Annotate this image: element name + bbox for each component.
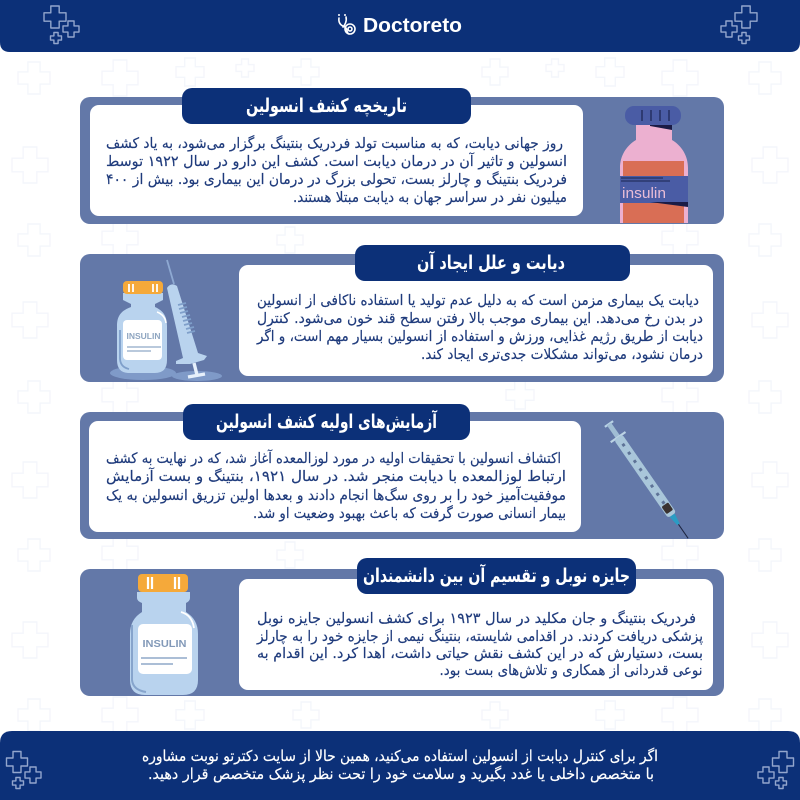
text card: روز جهانی دیابت، که به مناسبت تولد فردریک بنتینگ برگزار می‌شود، به یاد کشف xyxy=(106,134,563,152)
footer text: با متخصص داخلی یا غدد بگیرید و سلامت خود را تحت نظر پزشک متخصص قرار دهید. xyxy=(148,765,654,784)
text card: بست، دستیارش که در این کشف نقش حیاتی داشت، اهدا کرد. این اقدام به xyxy=(257,646,703,662)
text card xyxy=(89,421,581,532)
heading xyxy=(357,558,636,594)
logo: Doctoreto: Doctoreto xyxy=(363,15,462,37)
icon: vial and syringe xyxy=(110,260,222,381)
heading xyxy=(355,245,630,281)
icon: crosses right xyxy=(721,6,757,44)
icon: large insulin vial xyxy=(130,574,198,695)
text card: انسولین و تاثیر آن در درمان دیابت است. کشف این دارو در سال ۱۹۲۲ توسط xyxy=(106,152,567,170)
icon: large insulin vial: INSULIN xyxy=(142,639,186,650)
heading: جایزه نوبل و تقسیم آن بین دانشمندان xyxy=(363,563,630,587)
text card: نوعی قدردانی از همکاری و تلاش‌های بست بود. xyxy=(440,663,702,679)
panel: early insulin experiments xyxy=(80,404,724,543)
footer text xyxy=(142,747,658,784)
panel: diabetes and its causes xyxy=(80,245,724,382)
text card xyxy=(239,265,713,376)
text card: پزشکی دریافت کردند. در اقدامی شایسته، بنتینگ نیمی از جایزه خود را به چارلز xyxy=(256,627,703,645)
icon: crosses left xyxy=(6,752,41,788)
text card: فردریک بنتینگ و جان مکلید در سال ۱۹۲۳ برای کشف انسولین جایزه نوبل xyxy=(257,609,696,627)
text card: در بدن رخ می‌دهد. این بیماری موجب بالا رفتن سطح قند خون می‌شود. کنترل xyxy=(257,311,703,327)
icon: pink insulin bottle: insulin xyxy=(622,185,666,202)
text card: فردریک بنتینگ و چارلز بست، تحولی بزرگ در درمان این بیماری بود. بیش از ۴۰۰ xyxy=(106,170,567,188)
icon: syringe xyxy=(602,419,696,543)
text card: ارتباط لوزالمعده با دیابت منجر شد. در سال ۱۹۲۱، بنتینگ و بست آزمایش xyxy=(106,467,566,485)
text card: میلیون نفر در سراسر جهان به دیابت مبتلا هستند. xyxy=(293,190,567,206)
top header bar xyxy=(0,0,800,52)
text card: موفقیت‌آمیز خود را بر روی سگ‌ها انجام دادند و بعدها اولین تزریق انسولین به یک xyxy=(106,486,566,504)
heading xyxy=(183,404,470,440)
icon: vial and syringe: INSULIN xyxy=(126,331,160,341)
text card: دیابت از طریق رژیم غذایی، ورزش و استفاده از انسولین بسیار مهم است، و اگر xyxy=(256,328,703,345)
heading: آزمایش‌های اولیه کشف انسولین xyxy=(216,409,437,433)
text card: اکتشاف انسولین با تحقیقات اولیه در مورد لوزالمعده آغاز شد، که در نهایت به کشف xyxy=(106,449,561,467)
footer call to action xyxy=(0,731,800,800)
icon: crosses left xyxy=(44,6,79,44)
text card: دیابت یک بیماری مزمن است که به دلیل عدم تولید یا استفاده ناکافی از انسولین xyxy=(257,293,699,309)
text card: درمان نشود، می‌تواند مشکلات جدی‌تری ایجاد کند. xyxy=(421,347,703,363)
text card xyxy=(90,105,583,216)
text card: بیمار انسانی صورت گرفت که باعث بهبود وضعیت او شد. xyxy=(253,505,566,522)
heading: دیابت و علل ایجاد آن xyxy=(417,250,565,274)
heading: تاریخچه کشف انسولین xyxy=(246,95,407,117)
panel: Nobel prize xyxy=(80,558,724,696)
text card xyxy=(239,579,713,690)
icon: pink insulin bottle xyxy=(620,106,688,223)
footer text: اگر برای کنترل دیابت از انسولین استفاده می‌کنید، همین حالا از سایت دکترتو نوبت مشاوره xyxy=(142,747,658,765)
panel: history of insulin discovery xyxy=(80,88,724,224)
icon: crosses right xyxy=(758,752,794,788)
heading xyxy=(182,88,471,124)
